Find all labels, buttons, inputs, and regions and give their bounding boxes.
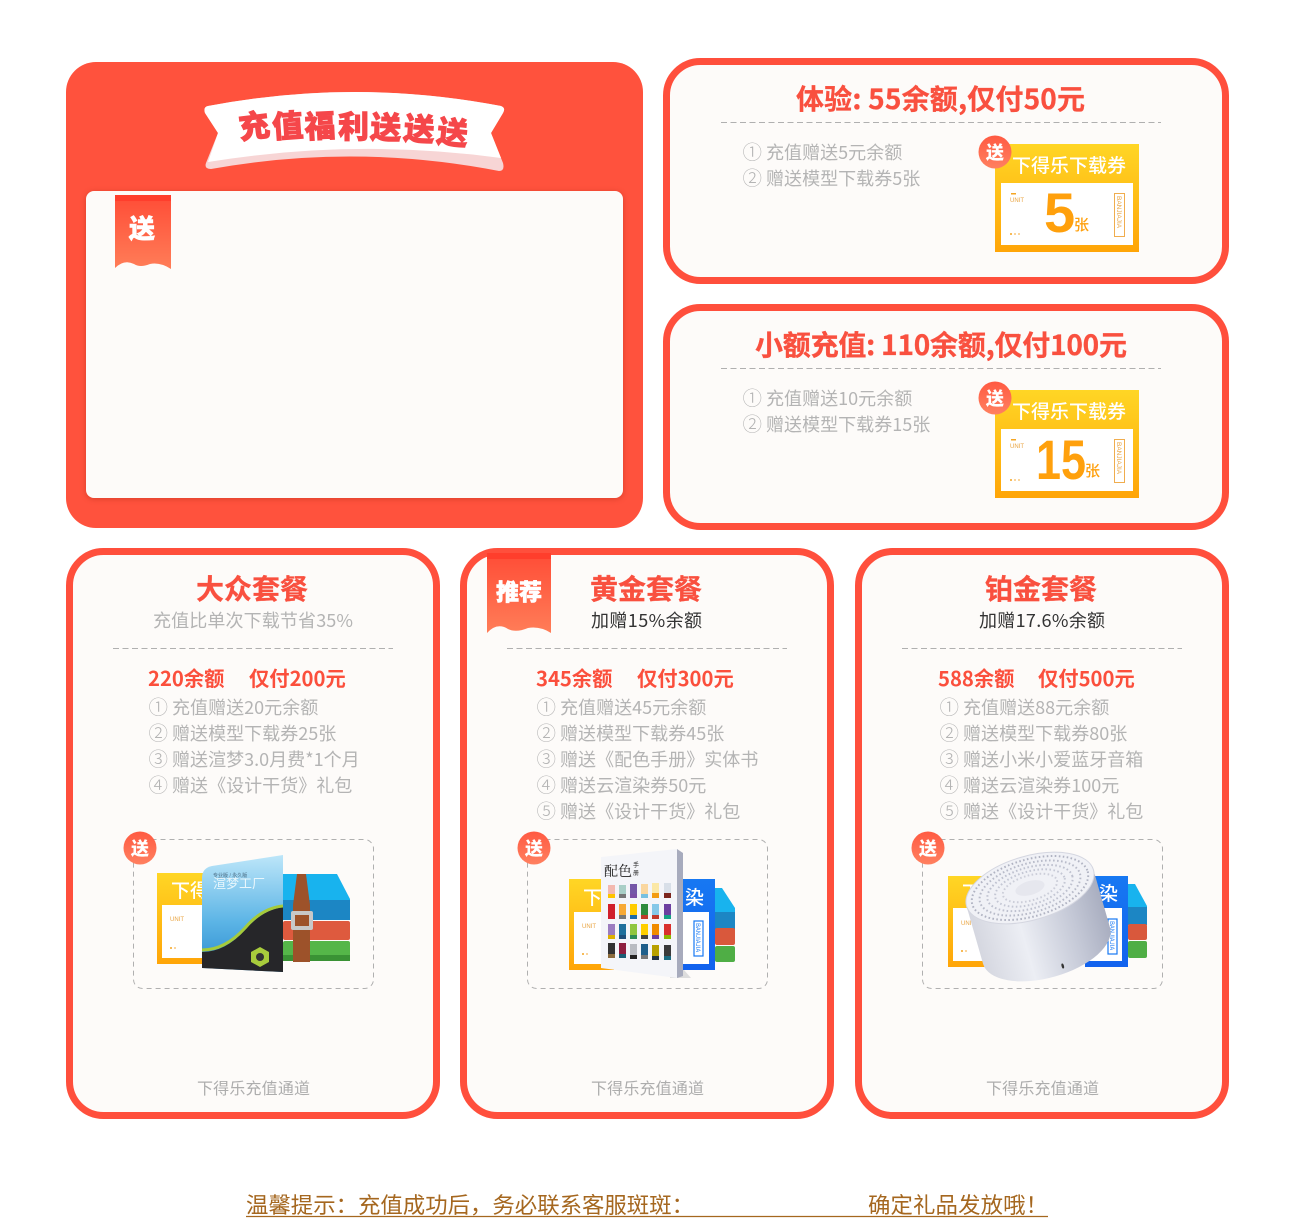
benefit list: ② xyxy=(742,408,762,437)
gift image: coupons, bluetooth speaker, archive books: UNIT xyxy=(961,921,975,927)
footer label: 下得乐充值通道 xyxy=(986,1075,1099,1099)
gift image: coupons, color handbook, archive books: 册 xyxy=(633,868,639,877)
gift image: coupon, software box, archive books: 渲梦工厂 xyxy=(213,873,265,892)
coupon: 5 vouchers: 5 xyxy=(1044,181,1075,244)
gift image: coupon, software box, archive books: 专业版 / 永久版 xyxy=(213,872,247,879)
banner: recharge benefits title xyxy=(204,92,504,171)
benefit list: 充值赠送45元余额 xyxy=(560,694,706,720)
badge: gift: 送 xyxy=(918,835,937,861)
benefit list xyxy=(742,136,920,191)
price line: 220余额 xyxy=(148,662,224,692)
badge: gift: 送 xyxy=(985,139,1004,165)
coupon: 5 vouchers: 张 xyxy=(1074,214,1089,235)
benefit list: ③ xyxy=(536,743,556,772)
gift image: coupons, bluetooth speaker, archive books: BANJIAJIA xyxy=(1108,921,1117,951)
badge: gift: 送 xyxy=(524,835,543,861)
price line: 仅付500元 xyxy=(1038,662,1135,692)
coupon: 5 vouchers: BANJIAJIA xyxy=(1115,196,1122,229)
benefit list: 赠送云渲染券50元 xyxy=(560,772,706,798)
gift image: coupons, color handbook, archive books: 下 xyxy=(583,883,602,910)
badge: gift xyxy=(978,136,1012,168)
benefit list: ② xyxy=(940,717,959,746)
panel: standard package xyxy=(70,552,436,1116)
coupon: 15 vouchers: 15 xyxy=(1036,428,1086,491)
benefit list xyxy=(148,691,360,798)
benefit list: 赠送渲梦3.0月费*1个月 xyxy=(172,746,360,772)
badge: gift xyxy=(518,832,550,864)
benefit list: 充值赠送20元余额 xyxy=(172,694,318,720)
benefit list: 充值赠送10元余额 xyxy=(766,385,912,411)
panel: experience package xyxy=(666,62,1226,280)
panel: gold package xyxy=(464,552,830,1116)
benefit list: ① xyxy=(536,691,556,720)
benefit list: 赠送《设计干货》礼包 xyxy=(963,798,1143,824)
coupon: 5 vouchers: 下得乐下载券 xyxy=(1012,151,1126,178)
price line xyxy=(938,662,1135,692)
benefit list: 充值赠送5元余额 xyxy=(766,139,902,165)
footer label: 下得乐充值通道 xyxy=(197,1075,310,1099)
badge: gift xyxy=(124,832,156,864)
banner: recharge benefits title: 充值福利送送送 xyxy=(236,99,471,154)
panel: small recharge package xyxy=(666,308,1226,526)
gift image: coupons, color handbook, archive books xyxy=(528,840,768,988)
coupon: 5 vouchers: UNIT xyxy=(1010,198,1024,204)
heading: 铂金套餐 xyxy=(985,568,1097,608)
benefit list: ① xyxy=(148,691,168,720)
gift image: coupons, bluetooth speaker, archive books xyxy=(922,839,1162,995)
gift image: coupons, color handbook, archive books: 染 xyxy=(685,883,704,910)
benefit list: ② xyxy=(536,717,556,746)
heading: 黄金套餐 xyxy=(590,568,702,608)
ribbon: recommended xyxy=(487,553,551,633)
ribbon: gift tag xyxy=(115,195,171,269)
heading: 大众套餐 xyxy=(196,568,308,608)
panel: platinum package xyxy=(858,552,1226,1116)
panel: recharge benefits xyxy=(66,62,643,528)
price line xyxy=(148,662,346,692)
benefit list: ③ xyxy=(148,743,168,772)
gift image: coupons, color handbook, archive books: 手 xyxy=(633,860,639,869)
benefit list: ① xyxy=(742,382,762,411)
gift image: coupon, software box, archive books: 下得 xyxy=(171,876,209,903)
coupon: 15 vouchers: 张 xyxy=(1085,460,1100,481)
coupon: 5 vouchers xyxy=(995,144,1139,252)
coupon: 15 vouchers: 下得乐下载券 xyxy=(1012,397,1126,424)
gift image: coupon, software box, archive books: UNIT xyxy=(170,917,184,923)
ribbon: gift tag: 送 xyxy=(128,209,155,246)
benefit list: 赠送《配色手册》实体书 xyxy=(560,746,758,772)
benefit list xyxy=(940,691,1143,824)
subtitle: 充值比单次下载节省35% xyxy=(153,607,353,633)
gift image: coupon, software box, archive books xyxy=(134,840,374,988)
benefit list: ④ xyxy=(940,769,959,798)
benefit list: ③ xyxy=(940,743,959,772)
coupon: 15 vouchers xyxy=(995,390,1139,498)
badge: gift xyxy=(978,382,1012,414)
gift image: coupons, bluetooth speaker, archive books: 下 xyxy=(962,878,981,905)
benefit list: ① xyxy=(742,136,762,165)
ribbon: recommended: 推荐 xyxy=(496,573,542,607)
price line: 588余额 xyxy=(938,662,1014,692)
heading: 体验: 55余额,仅付50元 xyxy=(796,78,1085,118)
benefit list: 赠送云渲染券100元 xyxy=(963,772,1119,798)
badge: gift: 送 xyxy=(130,835,149,861)
badge: gift xyxy=(912,832,944,864)
benefit list: 赠送模型下载券15张 xyxy=(766,411,930,437)
gift image: coupons, color handbook, archive books: BANJIAJIA xyxy=(694,923,703,953)
benefit list: 赠送《设计干货》礼包 xyxy=(172,772,352,798)
coupon: 15 vouchers: BANJIAJIA xyxy=(1115,442,1122,475)
footer notice xyxy=(246,1188,1048,1218)
benefit list: 赠送小米小爱蓝牙音箱 xyxy=(963,746,1143,772)
benefit list: ② xyxy=(742,162,762,191)
benefit list: 赠送《设计干货》礼包 xyxy=(560,798,740,824)
subtitle: 加赠15%余额 xyxy=(591,607,702,633)
gift image: coupons, color handbook, archive books: 配色 xyxy=(604,861,632,881)
benefit list: ⑤ xyxy=(536,795,556,824)
gift image: coupons, color handbook, archive books: UNIT xyxy=(582,924,596,930)
benefit list: 赠送模型下载券80张 xyxy=(963,720,1127,746)
subtitle: 加赠17.6%余额 xyxy=(979,607,1105,633)
benefit list: ⑤ xyxy=(940,795,959,824)
benefit list: 赠送模型下载券25张 xyxy=(172,720,336,746)
panel: white content area xyxy=(86,191,623,498)
gift image: coupons, bluetooth speaker, archive books: 染 xyxy=(1099,879,1118,906)
heading: 小额充值: 110余额,仅付100元 xyxy=(755,324,1127,364)
benefit list: ④ xyxy=(536,769,556,798)
price line: 345余额 xyxy=(536,662,612,692)
benefit list: 充值赠送88元余额 xyxy=(963,694,1109,720)
badge: gift: 送 xyxy=(985,385,1004,411)
price line: 仅付300元 xyxy=(637,662,734,692)
price line xyxy=(536,662,734,692)
benefit list: 赠送模型下载券45张 xyxy=(560,720,724,746)
benefit list xyxy=(536,691,758,824)
benefit list xyxy=(742,382,930,437)
benefit list: ① xyxy=(940,691,959,720)
price line: 仅付200元 xyxy=(249,662,346,692)
footer label: 下得乐充值通道 xyxy=(591,1075,704,1099)
benefit list: ④ xyxy=(148,769,168,798)
benefit list: ② xyxy=(148,717,168,746)
benefit list: 赠送模型下载券5张 xyxy=(766,165,920,191)
coupon: 15 vouchers: UNIT xyxy=(1010,444,1024,450)
